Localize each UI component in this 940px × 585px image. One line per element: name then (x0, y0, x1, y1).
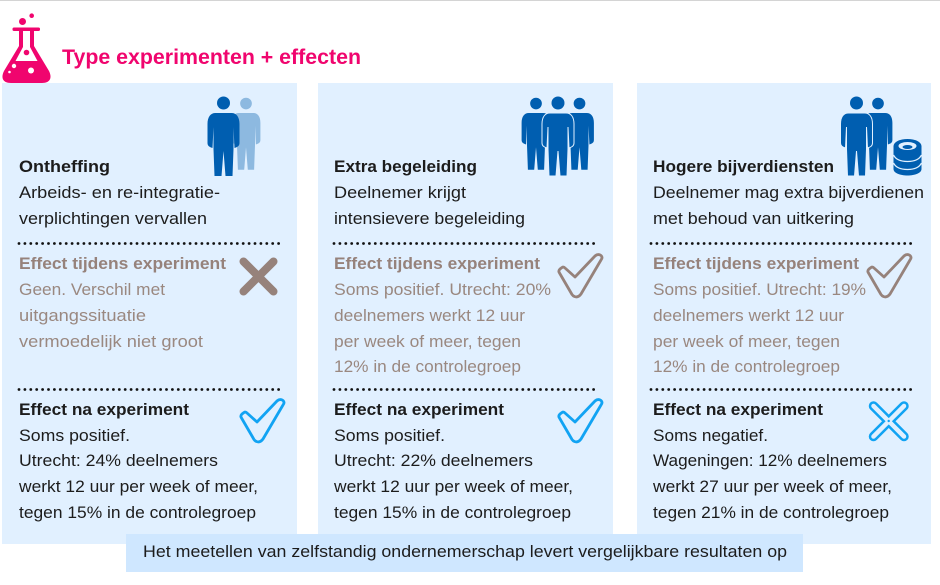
text: extra begeleiding description: Extra begeleiding (334, 158, 477, 176)
text: effect during experiment: deelnemers werkt 12 uur (334, 307, 526, 325)
text: effect after experiment: tegen 15% in de controlegroep (334, 504, 571, 522)
text: effect after experiment: werkt 12 uur per week of meer, (333, 478, 573, 496)
icon: three people (522, 96, 594, 176)
icon: grey check (559, 255, 602, 297)
text: ontheffing description: Arbeids- en re-integratie- (19, 184, 220, 202)
icon: two people with coins (840, 96, 923, 177)
text: hogere bijverdiensten description: met behoud van uitkering (653, 210, 854, 228)
icon: blue check (241, 400, 284, 442)
text: effect after experiment: Utrecht: 24% deelnemers (19, 452, 218, 470)
icon: grey check (868, 255, 911, 297)
panel: ontheffing (2, 83, 297, 544)
text: effect during experiment: Soms positief. Utrecht: 20% (334, 281, 551, 299)
icon: grey cross (244, 262, 274, 292)
text: effect after experiment: tegen 15% in de controlegroep (19, 504, 256, 522)
icon: pink flask (2, 13, 51, 83)
text: ontheffing description (19, 158, 220, 228)
text: effect during experiment: deelnemers werkt 12 uur (653, 307, 845, 325)
text: effect after experiment: Soms positief. (19, 427, 130, 445)
text: effect during experiment: uitgangssituatie (19, 307, 146, 325)
text: effect after experiment: Effect na experiment (334, 401, 505, 419)
text: extra begeleiding description (334, 158, 525, 228)
text: effect during experiment: Effect tijdens experiment (334, 255, 541, 273)
banner: footnote: Het meetellen van zelfstandig ondernemerschap levert vergelijkbare resultaten op (143, 543, 787, 561)
text: ontheffing description: verplichtingen vervallen (19, 210, 207, 228)
text: extra begeleiding description: Deelnemer krijgt (334, 184, 466, 202)
text: extra begeleiding description: intensievere begeleiding (334, 210, 525, 228)
icon: coins (892, 139, 923, 177)
text: effect during experiment: Geen. Verschil met (19, 281, 165, 299)
panel: extra begeleiding (318, 83, 613, 544)
text: effect after experiment: tegen 21% in de controlegroep (653, 504, 889, 522)
panel: hogere bijverdiensten (637, 83, 931, 544)
text: effect during experiment: per week of meer, tegen (334, 333, 521, 351)
title: Type experimenten + effecten (62, 46, 361, 69)
banner: footnote (126, 534, 803, 572)
text: effect after experiment: Soms negatief. (653, 427, 768, 445)
text: effect after experiment: Effect na experiment (653, 401, 824, 419)
text: effect after experiment (333, 401, 573, 522)
icon: blue check (559, 400, 602, 442)
text: ontheffing description: Ontheffing (19, 158, 110, 176)
text: hogere bijverdiensten description: Deelnemer mag extra bijverdienen (653, 184, 924, 202)
text: effect during experiment: 12% in de controlegroep (334, 358, 521, 376)
text: effect after experiment: Wageningen: 12% deelnemers (653, 452, 887, 470)
text: effect during experiment: 12% in de controlegroep (653, 358, 840, 376)
text: effect during experiment: Effect tijdens experiment (19, 255, 227, 273)
text: effect after experiment: Effect na experiment (19, 401, 190, 419)
text: effect during experiment: Effect tijdens experiment (653, 255, 860, 273)
text: effect after experiment (652, 401, 892, 522)
text: effect during experiment (653, 255, 866, 376)
text: hogere bijverdiensten description: Hogere bijverdiensten (653, 158, 834, 176)
text: hogere bijverdiensten description (653, 158, 924, 228)
text: effect during experiment (19, 255, 227, 351)
text: effect after experiment (18, 401, 258, 522)
text: effect during experiment: vermoedelijk niet groot (19, 333, 203, 351)
icon: two people (208, 96, 260, 176)
icon: blue outlined cross (874, 406, 904, 436)
text: effect after experiment: Utrecht: 22% deelnemers (334, 452, 533, 470)
text: effect during experiment: per week of meer, tegen (653, 333, 840, 351)
text: effect after experiment: werkt 12 uur per week of meer, (18, 478, 258, 496)
text: effect during experiment: Soms positief. Utrecht: 19% (653, 281, 866, 299)
text: effect after experiment: Soms positief. (334, 427, 445, 445)
text: effect during experiment (334, 255, 551, 376)
text: effect after experiment: werkt 27 uur per week of meer, (652, 478, 892, 496)
